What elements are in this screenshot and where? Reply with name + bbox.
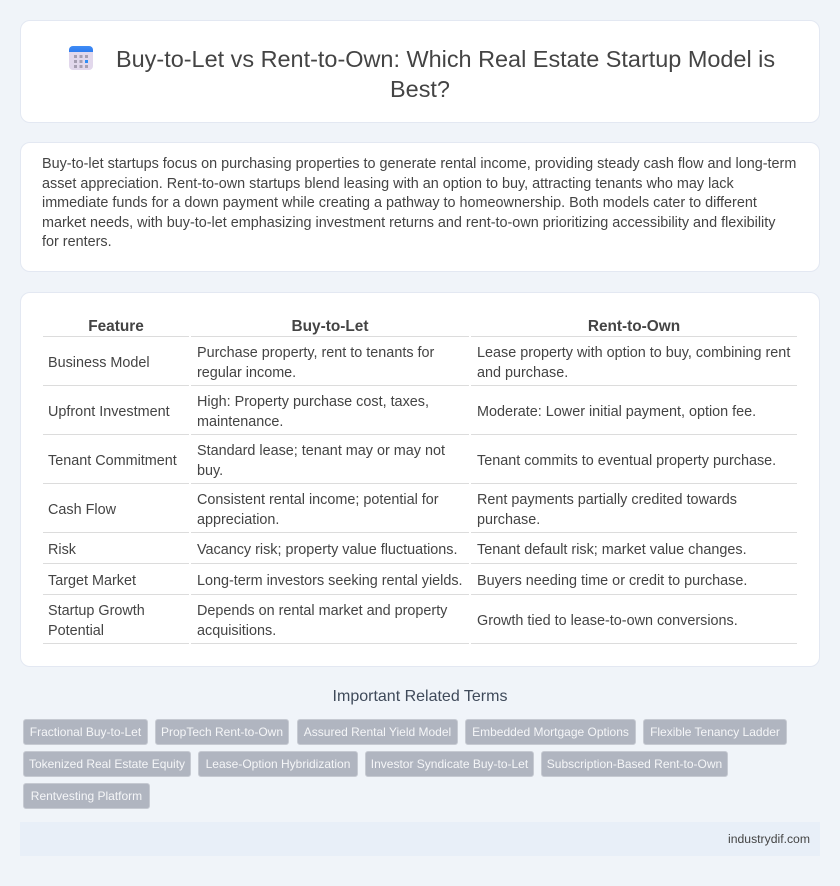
row: Target Market: Target Market: [48, 573, 136, 589]
panel: comparison table: [20, 292, 820, 667]
row: Tenant Commitment: [48, 443, 776, 478]
related terms tags: Fractional Buy-to-Let: [30, 725, 141, 739]
row: Business Model: Business Model: [48, 355, 150, 371]
row: Startup Growth Potential: acquisitions.: [197, 622, 276, 638]
title: [116, 46, 775, 102]
panel: title header: [20, 20, 820, 123]
table header: Feature: [88, 318, 144, 335]
table header: Rent-to-Own: [588, 318, 680, 335]
intro paragraph: for renters.: [42, 234, 112, 250]
intro paragraph: immediate funds for a down payment while creating a pathway to homeownership. Both models cater to different: [42, 195, 757, 211]
related terms tags: Subscription-Based Rent-to-Own: [547, 757, 722, 771]
row: Startup Growth Potential: Depends on rental market and property: [197, 603, 447, 619]
row: Cash Flow: purchase.: [477, 512, 540, 528]
related terms tags: [23, 719, 787, 809]
row: Tenant Commitment: Tenant commits to eventual property purchase.: [477, 453, 776, 469]
table header: Buy-to-Let: [292, 318, 368, 335]
related terms tags: Rentvesting Platform: [31, 789, 142, 803]
row: Target Market: Long-term investors seeking rental yields.: [197, 573, 463, 589]
row: Startup Growth Potential: Potential: [48, 622, 104, 638]
row: Business Model: and purchase.: [477, 364, 568, 380]
related terms tags: Assured Rental Yield Model: [304, 725, 451, 739]
row: Upfront Investment: [48, 394, 756, 430]
title: Best?: [390, 76, 450, 102]
row: Risk: [48, 542, 747, 558]
intro paragraph: market needs, with buy-to-let emphasizing investment returns and rent-to-own prioritizing accessibility and flexibility: [42, 214, 775, 230]
row: Cash Flow: Rent payments partially credited towards: [477, 492, 737, 508]
intro paragraph: asset appreciation. Rent-to-own startups blend leasing with an option to buy, attracting tenants who may lack: [42, 176, 734, 192]
intro paragraph: Buy-to-let startups focus on purchasing properties to generate rental income, providing steady cash flow and long-term: [42, 156, 796, 172]
footer bar: [20, 822, 820, 856]
row: Target Market: [48, 573, 747, 589]
row: Cash Flow: [48, 492, 737, 528]
related terms tags: Lease-Option Hybridization: [206, 757, 350, 771]
row: Tenant Commitment: Standard lease; tenant may or may not: [197, 443, 445, 459]
row: Cash Flow: Cash Flow: [48, 502, 116, 518]
related terms tags: PropTech Rent-to-Own: [161, 725, 283, 739]
row: Upfront Investment: maintenance.: [197, 414, 283, 430]
table header: [88, 318, 680, 335]
row: Business Model: [48, 345, 790, 380]
related terms tags: Embedded Mortgage Options: [472, 725, 629, 739]
row: Tenant Commitment: buy.: [197, 462, 223, 478]
row: Upfront Investment: Moderate: Lower initial payment, option fee.: [477, 404, 756, 420]
related terms heading: Important Related Terms: [333, 688, 507, 705]
row: Target Market: Buyers needing time or credit to purchase.: [477, 573, 747, 589]
row: Cash Flow: Consistent rental income; potential for: [197, 492, 439, 508]
panel: introduction text: [20, 142, 820, 272]
row: Business Model: Lease property with option to buy, combining rent: [477, 345, 790, 361]
title: Buy-to-Let vs Rent-to-Own: Which Real Estate Startup Model is: [116, 46, 775, 72]
related terms tags: Investor Syndicate Buy-to-Let: [371, 757, 528, 771]
row: Startup Growth Potential: Startup Growth: [48, 603, 145, 619]
icon: calendar: [69, 46, 93, 70]
row: Risk: Risk: [48, 542, 76, 558]
related terms tags: Tokenized Real Estate Equity: [29, 757, 185, 771]
intro paragraph: [42, 156, 796, 250]
row: Upfront Investment: Upfront Investment: [48, 404, 170, 420]
related terms tags: Flexible Tenancy Ladder: [650, 725, 780, 739]
row: Business Model: regular income.: [197, 364, 296, 380]
row: Upfront Investment: High: Property purchase cost, taxes,: [197, 394, 429, 410]
row: Startup Growth Potential: [48, 603, 738, 638]
row: Business Model: Purchase property, rent to tenants for: [197, 345, 434, 361]
row: Risk: Vacancy risk; property value fluctuations.: [197, 542, 458, 558]
footer source: industrydif.com: [728, 832, 810, 846]
row: Tenant Commitment: Tenant Commitment: [48, 453, 177, 469]
row: Risk: Tenant default risk; market value changes.: [477, 542, 747, 558]
row: Startup Growth Potential: Growth tied to lease-to-own conversions.: [477, 613, 738, 629]
row: Cash Flow: appreciation.: [197, 512, 279, 528]
